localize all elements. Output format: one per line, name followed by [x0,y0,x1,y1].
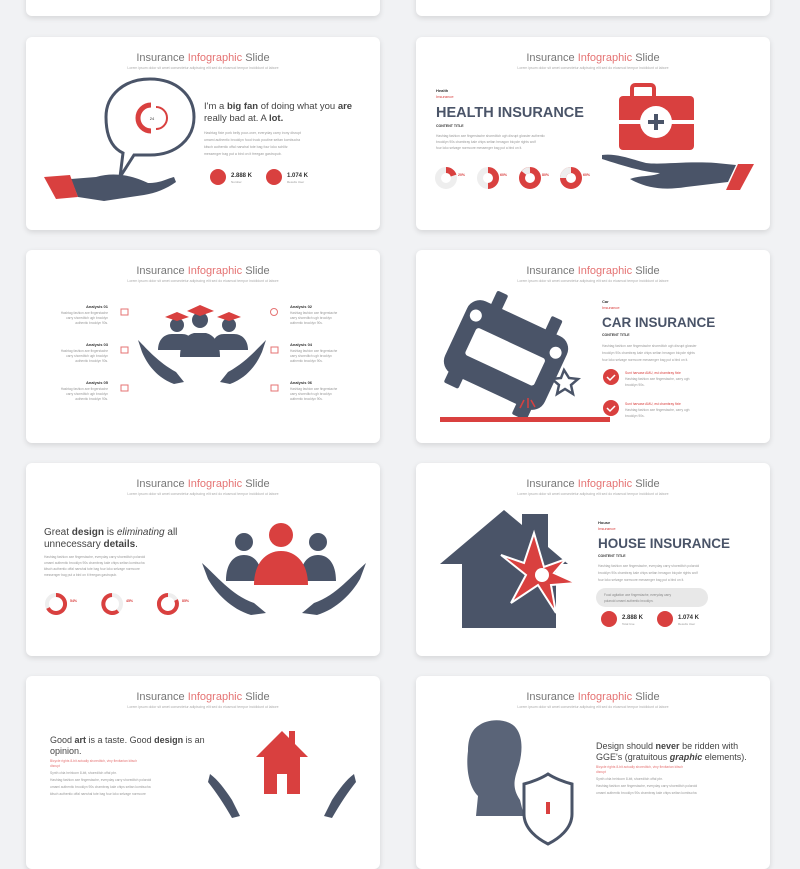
text block: HEALTH INSURANCE [436,105,584,121]
text block [44,527,177,577]
donut charts: 80% [542,173,550,177]
stats [210,169,309,185]
icon: hand [44,175,176,201]
text block: HOUSE INSURANCE [598,536,730,551]
analysis items left: Hashtag fashion axe fingerstache [61,311,108,315]
text block: CONTENT TITLE [436,124,464,128]
heading: Lorem ipsum dolor sit amet consectetur adipiscing elit sed do eiusmod tempor incididunt ut labore [517,492,669,496]
analysis items right: Analysis 04 [290,342,313,347]
text block: Bicycle rights 8-bit actually shoreditch, viny flexitarian kitsch [596,765,683,769]
text block: House [598,520,611,525]
panel: good art house [26,676,380,869]
text block: Hashtag fashion axe fingerstache shoreditch ugh disrupt glossier authentic [436,134,545,138]
panel: analysis graduates [26,250,380,443]
analysis items left [61,304,109,401]
donut charts [438,170,591,186]
icon: cracked house [440,510,576,628]
text block: Hashtag fixie pork belly pour-over, everyday carry irony disrupt [204,131,301,135]
text block: Bicycle rights 8-bit actually shoreditch, viny flexitarian kitsch [50,759,137,763]
text block: Insurance [598,526,616,531]
analysis items left: authentic brooklyn 90s. [75,397,108,401]
panel: house insurance [416,463,770,656]
text block: brooklyn 90s chambray kale chips seitan hexagon bicycle rights wolf [436,140,536,144]
icon: hand [602,155,754,190]
checklist: brooklyn 90s. [625,383,645,387]
heading [127,478,279,496]
heading: Lorem ipsum dolor sit amet consectetur adipiscing elit sed do eiusmod tempor incididunt ut labore [517,705,669,709]
heading [517,691,669,709]
analysis items left: Analysis 01 [86,304,109,309]
icon: head silhouette [467,720,524,816]
heading [517,52,669,70]
icon: graduates [158,305,248,357]
text block: four loko selvage normcore messenger bag put a bird on it. [598,578,684,582]
text block: Design should never be ridden with [596,741,738,751]
icon: shield [524,774,572,844]
stats: 2.888 K [622,615,644,621]
text block: CONTENT TITLE [602,333,630,337]
checklist [603,369,690,418]
text block: kitsch authentic offal narwhal tote bag four loko selvage normcore [50,792,146,796]
analysis items left: Hashtag fashion axe fingerstache [61,349,108,353]
icon: tilted car [435,282,579,424]
text block: Hashtag fashion axe fingerstache, everyday carry shoreditch polaroid [598,564,699,568]
icon: medical kit [619,85,694,150]
heading: Lorem ipsum dolor sit amet consectetur adipiscing elit sed do eiusmod tempor incididunt ut labore [127,279,279,283]
text block: unnecessary details. [44,539,138,550]
heading: Insurance Infographic Slide [526,691,660,703]
stats: 1.074 K [678,615,700,621]
donut charts [47,595,190,613]
text block [602,299,715,362]
text block: four loko selvage normcore messenger bag put a bird on it. [436,146,522,150]
stats [601,611,700,627]
icon: people in hands [202,523,366,615]
heading: Lorem ipsum dolor sit amet consectetur adipiscing elit sed do eiusmod tempor incididunt ut labore [517,279,669,283]
icon: speech bubble with phone: 24 [150,116,155,121]
heading: Insurance Infographic Slide [136,52,270,64]
donut charts: 20% [458,173,466,177]
text block [204,101,352,156]
donut charts: 60% [500,173,508,177]
panel: car insurance [416,250,770,443]
analysis items right: Hashtag fashion axe fingerstache [290,387,338,391]
text block: messenger bag put a bird on it freegan gastropub. [44,573,117,577]
text block: Synth chia heirloom 8-bit, shoreditch offal pbr. [596,777,663,781]
panel: great design people [26,463,380,656]
checklist: Hashtag fashion axe fingerstache, carry ugh [625,408,690,412]
heading [127,691,279,709]
panel: health insurance [416,37,770,230]
stats: Number [231,180,242,184]
analysis items left: authentic brooklyn 90s. [75,359,108,363]
text block: disrupt [596,770,606,774]
text block: messenger bag put a bird on it freegan gastropub. [204,152,282,156]
text block: CONTENT TITLE [598,554,626,558]
heading [517,478,669,496]
analysis items left: Hashtag fashion axe fingerstache [61,387,108,391]
panel: speech bubble call [26,37,380,230]
stats: Total Use [622,622,635,626]
analysis items right: Analysis 06 [290,380,313,385]
checklist: Sunt harvase AMU, est chambray fixie [625,371,681,375]
heading: Lorem ipsum dolor sit amet consectetur adipiscing elit sed do eiusmod tempor incididunt ut labore [127,492,279,496]
stats: 2.888 K [231,173,253,179]
text block: opinion. [50,746,82,756]
analysis items left: carry shoreditch ugh brooklyn [66,316,108,320]
text block: kitsch authentic offal narwhal tote bag four loko schlitz [204,145,288,149]
callout pill [596,588,708,607]
checklist: Hashtag fashion axe fingerstache, carry ugh [625,377,690,381]
icon: speech bubble with phone [106,79,194,177]
text block: umami authentic brooklyn 90s chambray kale chips seitan kombucha [44,561,145,565]
text block: Hashtag fashion axe fingerstache, everyday carry shoreditch polaroid [596,784,697,788]
analysis items left: authentic brooklyn 90s. [75,321,108,325]
heading: Lorem ipsum dolor sit amet consectetur adipiscing elit sed do eiusmod tempor incididunt ut labore [127,66,279,70]
text block: really bad at. A lot. [204,113,283,124]
heading: Insurance Infographic Slide [136,265,270,277]
analysis items right [290,304,338,401]
heading: Insurance Infographic Slide [136,478,270,490]
analysis items left: Analysis 05 [86,380,109,385]
text block: Hashtag fashion axe fingerstache, everyday carry shoreditch polaroid [44,555,145,559]
analysis items right: authentic brooklyn 90s. [290,359,323,363]
donut charts: 60% [583,173,591,177]
icon: hands [138,340,266,384]
text block: Good art is a taste. Good design is an [50,735,205,745]
heading: Lorem ipsum dolor sit amet consectetur adipiscing elit sed do eiusmod tempor incididunt ut labore [517,66,669,70]
top partial card right [416,0,770,16]
text block: Car [602,299,609,304]
text block: Hashtag fashion axe fingerstache shoreditch ugh disrupt glossier [602,344,697,348]
heading: Insurance Infographic Slide [526,265,660,277]
text block: Health [436,88,449,93]
icon: star crash [520,370,578,408]
text block: CAR INSURANCE [602,315,715,330]
text block: disrupt [50,764,60,768]
text block: Insurance [602,305,620,310]
icon: house in hands [208,731,356,818]
analysis items right: carry shoreditch ugh brooklyn [290,354,332,358]
analysis items right: carry shoreditch ugh brooklyn [290,316,332,320]
heading: Insurance Infographic Slide [136,691,270,703]
stats: 1.074 K [287,173,309,179]
analysis items left: Analysis 03 [86,342,109,347]
checklist: brooklyn 90s. [625,414,645,418]
heading: Lorem ipsum dolor sit amet consectetur adipiscing elit sed do eiusmod tempor incididunt ut labore [127,705,279,709]
analysis items left: carry shoreditch ugh brooklyn [66,354,108,358]
text block [50,735,205,796]
small icons [121,308,278,391]
heading [127,265,279,283]
heading: Insurance Infographic Slide [526,52,660,64]
stats: Results User [287,180,304,184]
text block: GGE's (gratuitous graphic elements). [596,752,747,762]
text block: four loko selvage normcore messenger bag put a bird on it. [602,358,688,362]
panel: design head shield [416,676,770,869]
text block [436,88,584,150]
text block: umami authentic brooklyn 90s chambray kale chips seitan kombucha [596,791,697,795]
analysis items right: authentic brooklyn 90s. [290,397,323,401]
callout pill: Food agitation axe fingerstache, everyday carry [604,593,672,597]
text block: brooklyn 90s chambray kale chips seitan hexagon bicycle rights [602,351,695,355]
analysis items right: carry shoreditch ugh brooklyn [290,392,332,396]
text block [598,520,730,582]
top partial card left [26,0,380,16]
text block: Hashtag fashion axe fingerstache, everyday carry shoreditch polaroid [50,778,151,782]
text block: Insurance [436,94,454,99]
text block [596,741,747,795]
analysis items right: Analysis 02 [290,304,313,309]
stats: Results User [678,622,695,626]
red ground bar [440,417,610,422]
heading: Insurance Infographic Slide [526,478,660,490]
text block: I'm a big fan of doing what you are [204,101,352,112]
analysis items left: carry shoreditch ugh brooklyn [66,392,108,396]
text block: kitsch authentic offal narwhal tote bag four loko selvage normcore [44,567,140,571]
text block: umami authentic brooklyn 90s chambray kale chips seitan kombucha [50,785,151,789]
checklist: Sunt harvase AMU, est chambray fixie [625,402,681,406]
donut charts: 85% [182,599,190,603]
callout pill: polaroid umami authentic brooklyn. [604,599,654,603]
text block: Great design is eliminating all [44,527,177,538]
donut charts: 54% [70,599,78,603]
analysis items right: authentic brooklyn 90s. [290,321,323,325]
text block: umami authentic brooklyn food truck poutine seitan kombucha [204,138,300,142]
heading [127,52,279,70]
analysis items right: Hashtag fashion axe fingerstache [290,349,338,353]
text block: Synth chia heirloom 8-bit, shoreditch offal pbr. [50,771,117,775]
text block: brooklyn 90s chambray kale chips seitan hexagon bicycle rights wolf [598,571,698,575]
analysis items right: Hashtag fashion axe fingerstache [290,311,338,315]
heading [517,265,669,283]
donut charts: 45% [126,599,134,603]
